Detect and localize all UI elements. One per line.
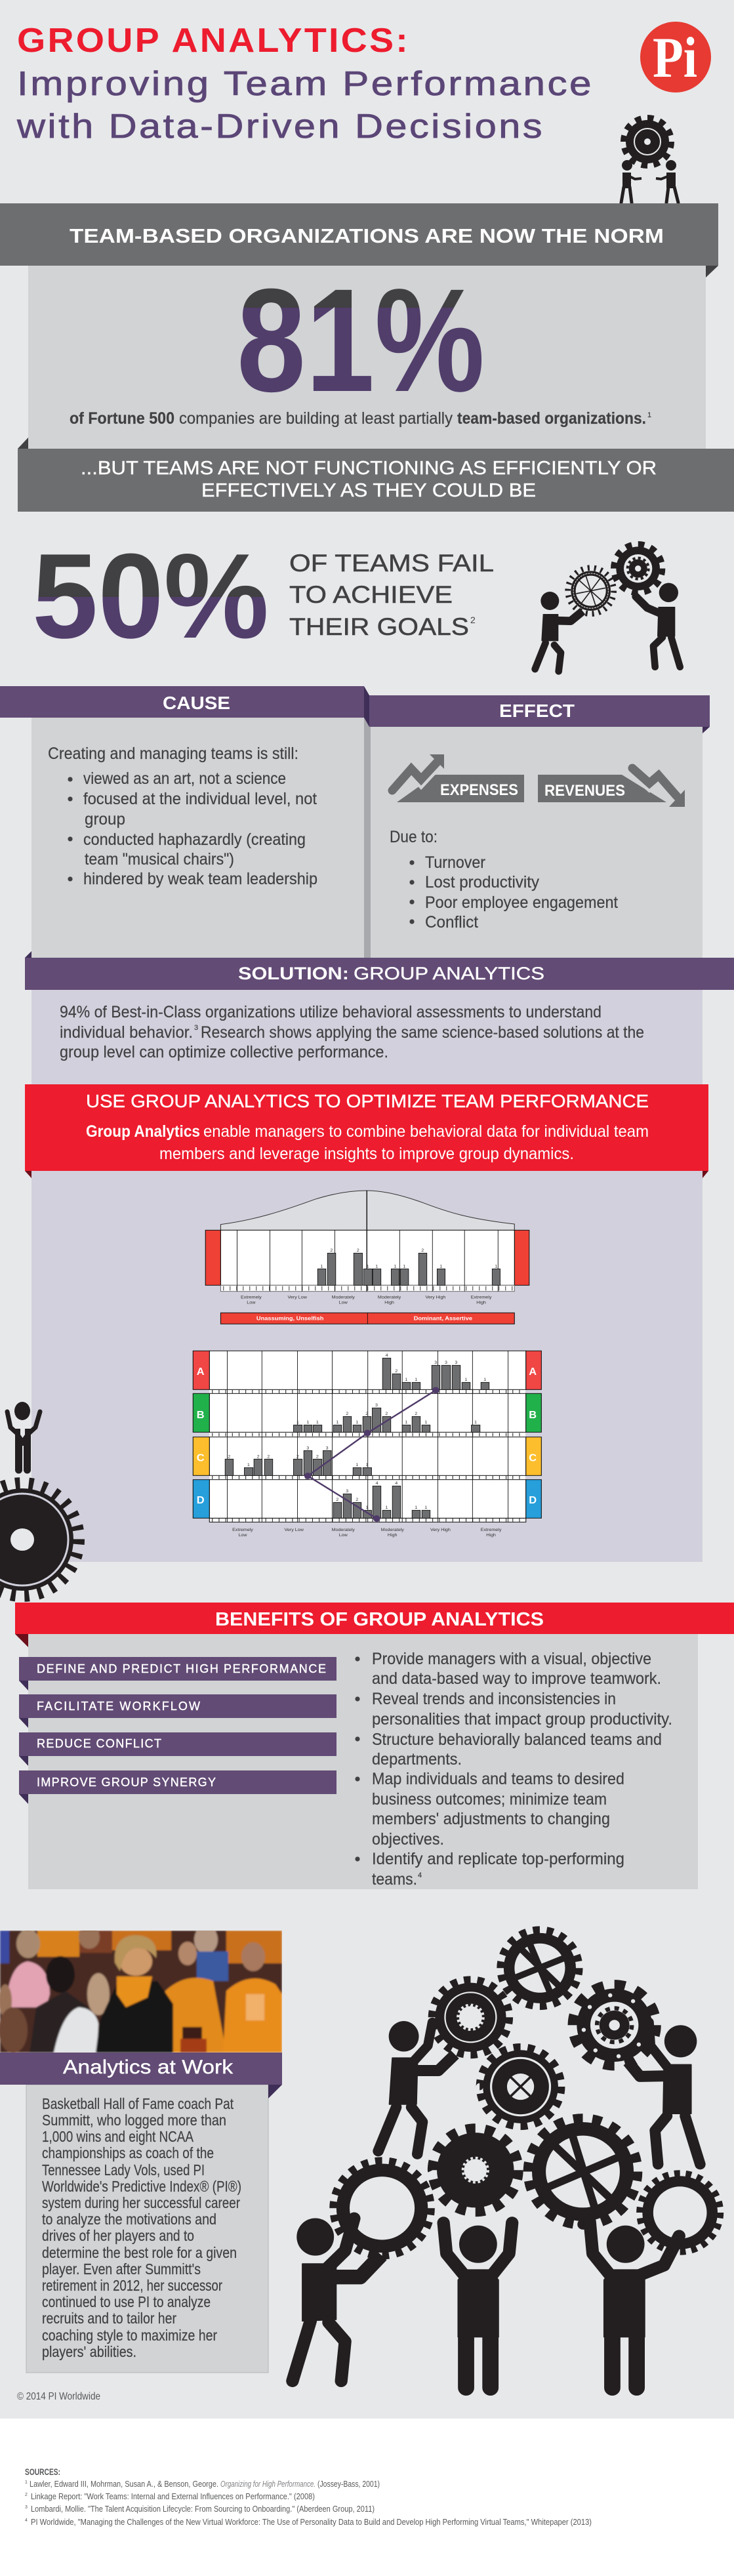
solution text xyxy=(60,1003,644,1061)
chart: group distribution bell curve: Unassuming, Unselfish xyxy=(256,1315,323,1322)
chart: group distribution bell curve: Extremely xyxy=(241,1296,262,1299)
case-study text: to analyze the motivations and xyxy=(42,2211,216,2228)
bars: row B: 1 xyxy=(316,1420,319,1425)
bars: row D: 4 xyxy=(395,1481,398,1486)
stat caption xyxy=(70,409,651,428)
bars: row A: 1 xyxy=(405,1378,407,1382)
panel: benefits of group analytics xyxy=(15,1603,734,1889)
tag: reduce conflict: REDUCE CONFLICT xyxy=(37,1737,161,1750)
benefits list: teams. xyxy=(372,1870,417,1889)
bars: row C: 2 xyxy=(228,1455,230,1460)
icon: two people holding a gear xyxy=(621,118,678,203)
sources xyxy=(25,2466,592,2527)
chart: team factors A B C D xyxy=(193,1351,541,1538)
solution text: individual behavior. xyxy=(60,1023,193,1042)
bars: row A: 2 xyxy=(395,1369,398,1374)
benefits list: Provide managers with a visual, objective xyxy=(372,1650,651,1668)
cause list xyxy=(48,745,317,888)
chart: group distribution bell curve: 2 xyxy=(421,1248,424,1253)
case-study text: recruits and to tailor her xyxy=(42,2310,176,2327)
bars: row B: 1 xyxy=(296,1420,299,1425)
case-study text: retirement in 2012, her successor xyxy=(42,2277,222,2294)
stat caption: companies are building at least partially xyxy=(179,409,453,428)
icon: team of people assembling gears xyxy=(293,1930,720,2388)
chart: group distribution bell curve: 1 xyxy=(440,1265,443,1269)
icon: revenues falling: REVENUES xyxy=(544,782,625,800)
stat caption: 1 xyxy=(647,411,651,419)
chart: team factors A B C D: Low xyxy=(238,1533,247,1538)
effect list: Due to: xyxy=(390,828,438,846)
chart: team factors A B C D: Moderately xyxy=(381,1528,404,1532)
sources: Lawler, Edward III, Mohrman, Susan A., & Benson, George. xyxy=(30,2479,218,2489)
bars: row C: 3 xyxy=(306,1446,309,1451)
stat caption: team-based organizations. xyxy=(457,409,646,428)
person: upper left xyxy=(378,2021,455,2154)
bars: row D: 1 xyxy=(385,1505,388,1510)
band: teams not functioning: ...BUT TEAMS ARE NOT FUNCTIONING AS EFFICIENTLY OR xyxy=(81,458,657,479)
bars: row D: 1 xyxy=(415,1505,417,1510)
bars: row A xyxy=(382,1353,489,1389)
stat: 81%: 81% xyxy=(237,258,485,422)
case-study text: drives of her players and to xyxy=(42,2227,194,2244)
chart: team factors A B C D: Moderately xyxy=(332,1528,355,1532)
bars: row A: 1 xyxy=(415,1378,417,1382)
chart: group distribution bell curve: High xyxy=(384,1301,394,1305)
benefits list: Structure behaviorally balanced teams and xyxy=(372,1730,662,1749)
case-study text: Summitt, who logged more than xyxy=(42,2112,226,2129)
person: bottom center xyxy=(443,2223,512,2388)
heading: TEAM-BASED ORGANIZATIONS ARE NOW THE NORM xyxy=(70,224,664,247)
benefits heading: BENEFITS OF GROUP ANALYTICS xyxy=(215,1609,544,1630)
chart: group distribution bell curve: 1 xyxy=(495,1265,498,1269)
solution text: group level can optimize collective performance. xyxy=(60,1043,388,1061)
chart: group distribution bell curve: Extremely xyxy=(471,1296,492,1299)
banner: use group analytics xyxy=(25,1084,708,1178)
chart: team factors A B C D: A xyxy=(529,1366,537,1378)
chart: team factors A B C D: Extremely xyxy=(232,1528,253,1532)
bars: row C: 2 xyxy=(267,1455,270,1460)
text: of teams fail xyxy=(289,550,494,640)
title: with Data-Driven Decisions xyxy=(16,108,544,146)
person: upper right xyxy=(628,2022,700,2164)
gear: lower left ring xyxy=(334,2161,430,2255)
chart: group distribution bell curve: High xyxy=(476,1301,486,1305)
case-study text xyxy=(42,2095,241,2360)
effect list: Poor employee engagement xyxy=(425,893,618,912)
sources: 4 xyxy=(25,2518,28,2523)
sources: 1 xyxy=(25,2480,28,2485)
sources: 3 xyxy=(25,2505,28,2510)
bars: row D: 2 xyxy=(356,1498,358,1502)
sources: Organizing for High Performance. xyxy=(220,2479,316,2489)
solution heading: GROUP ANALYTICS xyxy=(354,964,544,983)
case-study text: system during her successful career xyxy=(42,2194,240,2211)
sources: Linkage Report: "Work Teams: Internal and External Influences on Performance." (2008) xyxy=(31,2491,315,2501)
benefits heading band xyxy=(15,1603,734,1634)
icon: two people with gears xyxy=(535,544,680,671)
bars: row B: 1 xyxy=(336,1420,338,1425)
bars: row A: 4 xyxy=(386,1353,388,1358)
sources: PI Worldwide, "Managing the Challenges of the New Virtual Workforce: The Use of Personality Data to Build and Develop High Performing Virtual Teams," Whitepaper (2013) xyxy=(31,2517,592,2527)
benefits list: personalities that impact group productivity. xyxy=(372,1710,672,1728)
chart: team factors A B C D: C xyxy=(197,1453,205,1463)
gear: middle xyxy=(479,2047,561,2127)
icon: revenues falling xyxy=(538,768,685,807)
tag: define and predict xyxy=(19,1657,336,1690)
bars: row C: 1 xyxy=(356,1463,358,1467)
chart: group distribution bell curve: Low xyxy=(247,1301,255,1305)
chart: group distribution bell curve: Moderately xyxy=(378,1296,401,1299)
title: Improving Team Performance xyxy=(17,65,594,103)
photo: coach in crowd xyxy=(0,1925,282,2053)
gear: upper left ringed xyxy=(432,1980,509,2055)
chart: group distribution bell curve: 1 xyxy=(320,1265,323,1269)
bars: row B: 2 xyxy=(365,1412,368,1416)
tag: improve group synergy xyxy=(19,1770,336,1804)
banner: use group analytics: members and leverage insights to improve group dynamics. xyxy=(159,1145,574,1163)
bars: row D: 3 xyxy=(346,1489,348,1494)
chart: team factors A B C D: A xyxy=(197,1366,205,1378)
chart: group distribution bell curve: 2 xyxy=(330,1248,333,1253)
chart: group distribution bell curve: Very Low xyxy=(288,1296,307,1299)
bars: row B xyxy=(293,1403,480,1432)
PI logo: Pi xyxy=(653,26,697,90)
chart: team factors A B C D: D xyxy=(529,1495,537,1506)
sources: Lombardi, Mollie. "The Talent Acquisition Lifecycle: From Sourcing to Onboarding." (Aberdeen Group, 2011) xyxy=(31,2504,375,2514)
chart: group distribution bell curve: Very High xyxy=(425,1296,446,1299)
stat: 50%: 50% xyxy=(32,528,269,663)
title: GROUP ANALYTICS: xyxy=(17,22,410,60)
stat caption: of Fortune 500 xyxy=(70,409,174,428)
case-study text: players' abilities. xyxy=(42,2343,136,2360)
chart: group distribution bell curve: 1 xyxy=(394,1265,397,1269)
gear: large spoked xyxy=(529,2119,637,2224)
effect heading: EFFECT xyxy=(499,701,575,721)
tag: reduce conflict xyxy=(19,1732,336,1766)
bars: row B: 2 xyxy=(346,1412,348,1416)
tag: improve group synergy: IMPROVE GROUP SYNERGY xyxy=(37,1776,216,1789)
bars: row D: 4 xyxy=(376,1481,378,1486)
benefits body xyxy=(28,1634,698,1889)
effect list: Lost productivity xyxy=(425,873,539,891)
bars: row C: 2 xyxy=(257,1455,260,1460)
solution body xyxy=(31,990,703,1562)
solution text: Research shows applying the same science-based solutions at the xyxy=(201,1023,644,1042)
bars: row B: 2 xyxy=(415,1412,417,1416)
bars: row C: 1 xyxy=(247,1463,250,1467)
text: of teams fail: 2 xyxy=(470,615,476,625)
chart: group distribution bell curve: 2 xyxy=(357,1248,359,1253)
chart: team factors A B C D: Low xyxy=(339,1533,348,1538)
case-study text: continued to use PI to analyze xyxy=(42,2293,211,2310)
case-study text: player. Even after Summitt's xyxy=(42,2260,201,2278)
benefits list: objectives. xyxy=(372,1830,444,1849)
solution heading band xyxy=(25,958,734,990)
solution heading xyxy=(238,964,544,983)
effect list xyxy=(390,828,618,931)
trend line xyxy=(304,1387,439,1522)
bars: row B: 3 xyxy=(375,1403,378,1408)
benefits list: 4 xyxy=(418,1871,422,1879)
benefits list: Identify and replicate top-performing xyxy=(372,1850,624,1868)
bars: row C: 1 xyxy=(366,1463,369,1467)
chart: team factors A B C D: B xyxy=(197,1410,205,1421)
gear: upper right dotted xyxy=(573,1985,656,2066)
effect list: Turnover xyxy=(425,853,485,872)
bars: row B: 1 xyxy=(474,1420,477,1425)
chart: team factors A B C D: High xyxy=(486,1533,496,1538)
cause heading band xyxy=(0,686,364,718)
bars: row B: 1 xyxy=(306,1420,309,1425)
benefits list: Reveal trends and inconsistencies in xyxy=(372,1690,616,1708)
chart: group distribution bell curve: Low xyxy=(339,1301,348,1305)
solution heading: SOLUTION: xyxy=(238,964,349,983)
cause list: team "musical chairs") xyxy=(85,850,234,869)
solution text: 3 xyxy=(194,1024,198,1032)
icon: expenses rising xyxy=(392,754,524,802)
chart: team factors A B C D: C xyxy=(529,1453,537,1463)
bars: row D: 2 xyxy=(336,1498,338,1502)
case-study heading: Analytics at Work xyxy=(63,2056,234,2078)
chart: team factors A B C D: D xyxy=(197,1495,205,1506)
solution text: 94% of Best-in-Class organizations utilize behavioral assessments to understand xyxy=(60,1003,601,1021)
chart: team factors A B C D: B xyxy=(529,1410,537,1421)
gear: lower solid xyxy=(433,2129,518,2212)
bars: row B: 2 xyxy=(385,1412,388,1416)
cause list: conducted haphazardly (creating xyxy=(83,830,306,849)
gear: lower right ring xyxy=(640,2174,720,2251)
chart: team factors A B C D: Extremely xyxy=(481,1528,502,1532)
bars: row C xyxy=(225,1446,371,1475)
panel: cause xyxy=(0,686,364,958)
person: bottom left xyxy=(293,2218,381,2381)
text: of teams fail: TO ACHIEVE xyxy=(289,581,453,608)
banner: use group analytics: Group Analytics xyxy=(86,1122,200,1141)
bars: row C: 2 xyxy=(316,1455,319,1460)
chart: group distribution bell curve: 1 xyxy=(375,1265,378,1269)
icon: person standing on gear xyxy=(0,1402,79,1596)
band: teams not functioning xyxy=(18,449,734,512)
banner: use group analytics: enable managers to combine behavioral data for individual team xyxy=(203,1122,649,1141)
gear: top spoked xyxy=(500,1930,579,2007)
cause list: viewed as an art, not a science xyxy=(83,769,286,788)
person: bottom right xyxy=(590,2221,679,2388)
case-study text: Basketball Hall of Fame coach Pat xyxy=(42,2095,234,2112)
copyright: © 2014 PI Worldwide xyxy=(17,2391,100,2402)
band: teams not functioning: EFFECTIVELY AS THEY COULD BE xyxy=(201,480,536,501)
benefits list: departments. xyxy=(372,1750,462,1768)
case-study heading band xyxy=(0,2053,282,2085)
sources: SOURCES: xyxy=(25,2466,60,2477)
effect list: Conflict xyxy=(425,913,478,931)
case-study text: determine the best role for a given xyxy=(42,2244,237,2261)
bars: row D xyxy=(333,1481,430,1518)
bars: row C: 3 xyxy=(326,1446,329,1451)
sources: 2 xyxy=(25,2493,28,2497)
bars: row C: 2 xyxy=(296,1455,299,1460)
chart: team factors A B C D: High xyxy=(388,1533,398,1538)
panel body xyxy=(28,266,706,449)
sources: (Jossey-Bass, 2001) xyxy=(317,2479,380,2489)
benefits list: members' adjustments to changing xyxy=(372,1810,610,1828)
panel: solution xyxy=(25,951,734,1562)
effect body xyxy=(364,718,371,958)
bars: row A: 3 xyxy=(445,1360,447,1365)
benefits list: and data-based way to improve teamwork. xyxy=(372,1669,661,1688)
tag: facilitate workflow xyxy=(19,1694,336,1728)
tag: facilitate workflow: FACILITATE WORKFLOW xyxy=(37,1700,200,1713)
chart: group distribution bell curve: 1 xyxy=(403,1265,406,1269)
chart: group distribution bell curve xyxy=(205,1191,529,1324)
bars: row A: 3 xyxy=(434,1360,437,1365)
tag: define and predict: DEFINE AND PREDICT HIGH PERFORMANCE xyxy=(37,1662,326,1675)
chart: group distribution bell curve: Dominant, Assertive xyxy=(414,1315,472,1322)
bars: row D: 1 xyxy=(366,1505,369,1510)
cause body xyxy=(31,718,364,958)
panel: effect xyxy=(364,686,710,958)
chart: team factors A B C D: Very Low xyxy=(285,1528,304,1532)
banner: use group analytics: USE GROUP ANALYTICS TO OPTIMIZE TEAM PERFORMANCE xyxy=(86,1091,649,1111)
bars: row B: 1 xyxy=(356,1420,358,1425)
text: of teams fail: OF TEAMS FAIL xyxy=(289,550,494,577)
benefits list: Map individuals and teams to desired xyxy=(372,1770,624,1788)
case-study text: championships as coach of the xyxy=(42,2144,214,2161)
cause list: focused at the individual level, not xyxy=(83,790,317,808)
bars: row B: 1 xyxy=(405,1420,407,1425)
effect heading band xyxy=(369,695,710,727)
PI logo xyxy=(640,22,711,92)
chart: team factors A B C D: Very High xyxy=(430,1528,451,1532)
bars: row A: 1 xyxy=(483,1378,486,1382)
bars: row D: 1 xyxy=(424,1505,427,1510)
bars: row B: 1 xyxy=(424,1420,427,1425)
text: of teams fail: THEIR GOALS xyxy=(289,613,469,640)
bars: row A: 1 xyxy=(464,1378,468,1382)
cause list: group xyxy=(85,810,125,828)
title xyxy=(16,22,594,146)
chart: group distribution bell curve: 1 xyxy=(367,1265,369,1269)
case-study text: 1,000 wins and eight NCAA xyxy=(42,2128,194,2145)
bars: row A: 3 xyxy=(455,1360,458,1365)
benefits list: business outcomes; minimize team xyxy=(372,1790,607,1809)
cause list: hindered by weak team leadership xyxy=(83,870,317,888)
panel: team-based organizations xyxy=(0,203,718,449)
heading band xyxy=(0,203,718,266)
case-study body xyxy=(26,2085,268,2373)
case-study text: Worldwide's Predictive Index® (PI®) xyxy=(42,2178,241,2195)
case-study text: coaching style to maximize her xyxy=(42,2327,217,2344)
benefits list xyxy=(356,1650,672,1889)
case-study text: Tennessee Lady Vols, used PI xyxy=(42,2161,205,2178)
panel: analytics at work xyxy=(0,2053,282,2373)
cause list: Creating and managing teams is still: xyxy=(48,745,298,763)
cause heading: CAUSE xyxy=(163,693,230,713)
chart: group distribution bell curve: Moderately xyxy=(332,1296,355,1299)
icon: expenses rising: EXPENSES xyxy=(440,781,518,799)
